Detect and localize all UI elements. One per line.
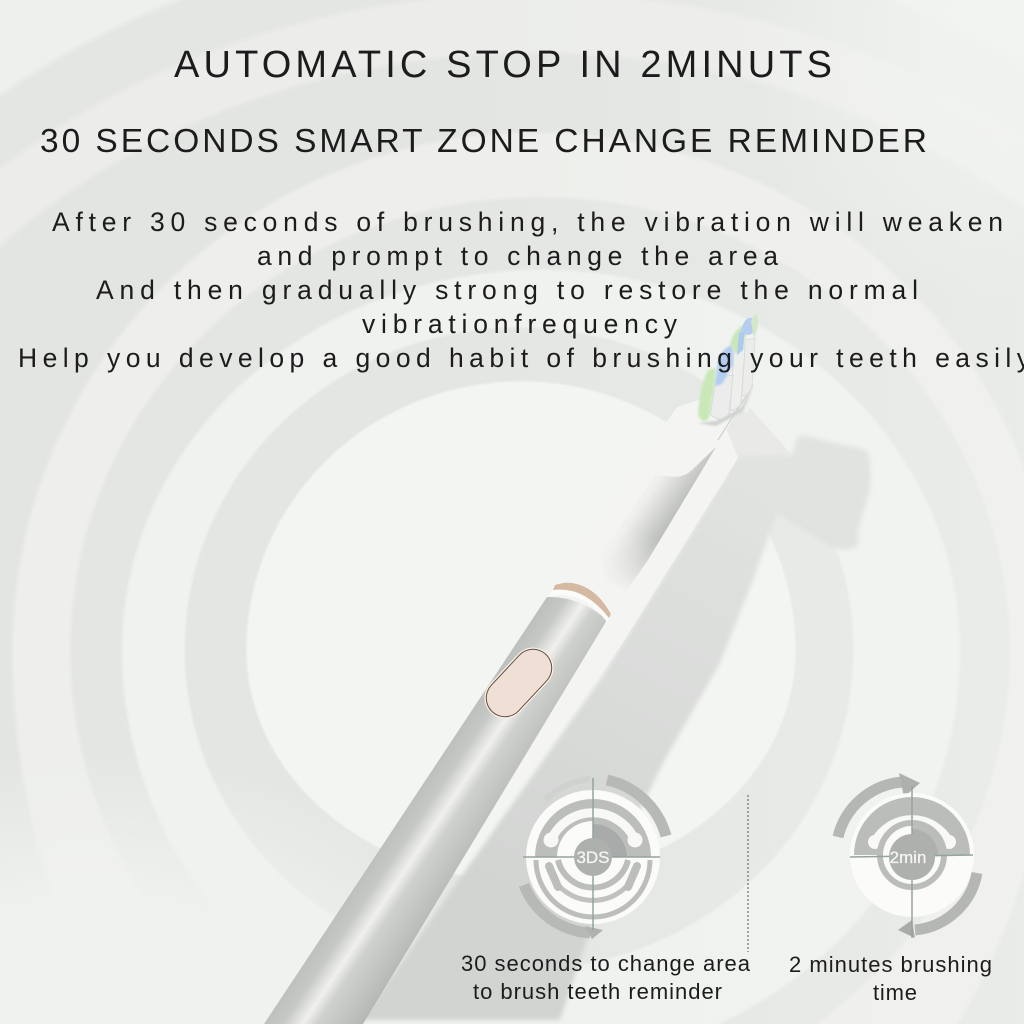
heading: automatic stop: AUTOMATIC STOP IN 2MINUTS (174, 44, 832, 86)
description text block: After 30 seconds of brushing, the vibration will weaken (52, 207, 1003, 237)
heading: smart zone reminder: 30 SECONDS SMART ZONE CHANGE REMINDER (40, 123, 927, 160)
icon: 30 second zone reminder dial: 3DS (576, 848, 610, 867)
collar ring (547, 583, 612, 622)
caption: 2 minutes (789, 952, 992, 1005)
caption: 30 seconds: to brush teeth reminder (473, 979, 722, 1004)
description text block: And then gradually strong to restore the normal (96, 275, 918, 305)
neck and head (556, 383, 753, 613)
description text block: Help you develop a good habit of brushing your teeth easily (18, 343, 1024, 373)
icon: 30 second zone reminder dial (523, 778, 666, 939)
caption: 30 seconds (461, 951, 751, 1004)
caption: 2 minutes: time (873, 980, 917, 1005)
caption: 30 seconds: 30 seconds to change area (461, 951, 751, 976)
caption: 2 minutes: 2 minutes brushing (789, 952, 992, 977)
dotted divider (747, 795, 749, 952)
handle (264, 597, 607, 1024)
description text block (18, 207, 1024, 373)
description text block: vibrationfrequency (362, 309, 678, 339)
neck underside shading (614, 447, 716, 585)
power button (505, 668, 533, 698)
icon: 2 minute timer dial (838, 773, 977, 938)
bristles (698, 313, 758, 421)
description text block: and prompt to change the area (257, 241, 778, 271)
brush head edge shadow (698, 385, 753, 426)
toothbrush (264, 313, 758, 1024)
icon: 2 minute timer dial: 2min (890, 848, 926, 867)
toothbrush cast shadow (360, 408, 870, 1020)
